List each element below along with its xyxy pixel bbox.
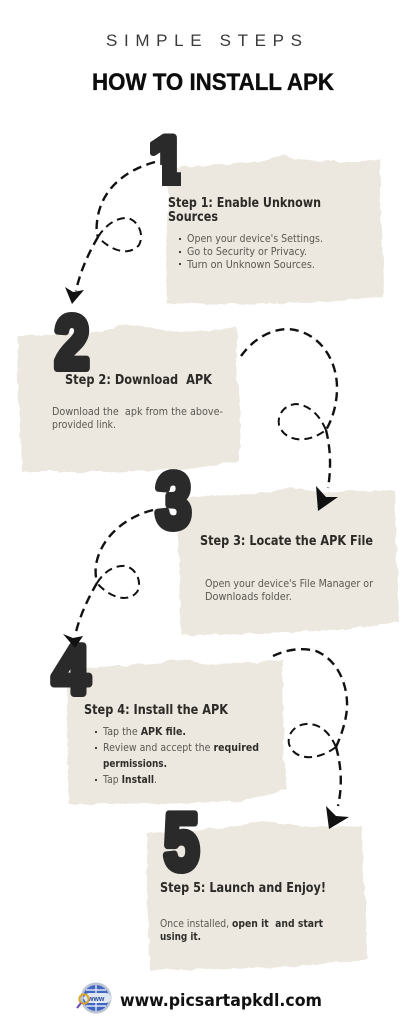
step 2 body text: Download the apk from the above-	[52, 405, 223, 418]
panel: step 2	[17, 325, 240, 472]
arrow: step 3 to step 4	[75, 510, 153, 636]
step 4 bullet list: Tap the APK file.	[102, 725, 186, 738]
step 3 heading: Step 3: Locate the APK File	[200, 533, 373, 549]
arrow: step 4 to step 5	[273, 649, 349, 829]
website url: www.picsartapkdl.com	[120, 991, 322, 1011]
panel: step 3	[178, 487, 399, 635]
step 4 bullet list: permissions.	[103, 757, 167, 770]
step 3 body text	[205, 577, 373, 603]
panel: step 5	[147, 821, 367, 970]
paper card 3	[178, 487, 399, 635]
heading: simple steps: SIMPLE STEPS	[106, 31, 302, 50]
step 4 bullet list	[95, 725, 259, 786]
panel: step 4	[67, 659, 287, 804]
step 2 heading: Step 2: Download APK	[65, 372, 212, 388]
title: HOW TO INSTALL APK	[92, 69, 335, 96]
step 5 body text: Once installed, open it and start	[160, 917, 323, 930]
step 3 body text: Open your device's File Manager or	[205, 577, 373, 590]
arrowhead into step 4	[63, 634, 83, 648]
number 5: 5	[164, 797, 199, 886]
icon: www globe: www	[87, 996, 105, 1003]
step 1 heading: Step 1: Enable Unknown	[168, 195, 321, 211]
step 4 bullet list: Review and accept the required	[103, 741, 259, 754]
number 3: 3	[156, 458, 191, 544]
step 3 body text: Downloads folder.	[205, 590, 292, 603]
paper card 5	[147, 821, 367, 970]
paper card 4	[67, 659, 287, 804]
step 2 body text: provided link.	[52, 418, 116, 431]
number 2: 2	[55, 301, 89, 384]
number 1: 1	[149, 123, 185, 197]
arrow: step 1 to step 2	[65, 162, 155, 304]
step 1 bullet list: Open your device's Settings.	[187, 232, 323, 245]
paper card 2	[17, 325, 240, 472]
step 5 heading: Step 5: Launch and Enjoy!	[160, 880, 326, 896]
step 4 bullet list: Tap Install.	[102, 773, 157, 786]
step 1 heading second line: Sources	[168, 209, 218, 225]
step 1 bullet list	[179, 232, 323, 271]
step 1 bullet list: Turn on Unknown Sources.	[186, 258, 315, 271]
paper card 1	[166, 155, 384, 304]
step 5 body text	[160, 917, 323, 943]
icon: www globe	[77, 982, 112, 1014]
number 4: 4	[53, 632, 89, 708]
step 5 body text: using it.	[160, 930, 201, 943]
arrow: step 2 to step 3	[241, 329, 338, 511]
step 1 bullet list: Go to Security or Privacy.	[187, 245, 307, 258]
panel: step 1	[166, 155, 384, 304]
step 2 body text	[52, 405, 223, 431]
step 4 heading: Step 4: Install the APK	[84, 702, 228, 718]
